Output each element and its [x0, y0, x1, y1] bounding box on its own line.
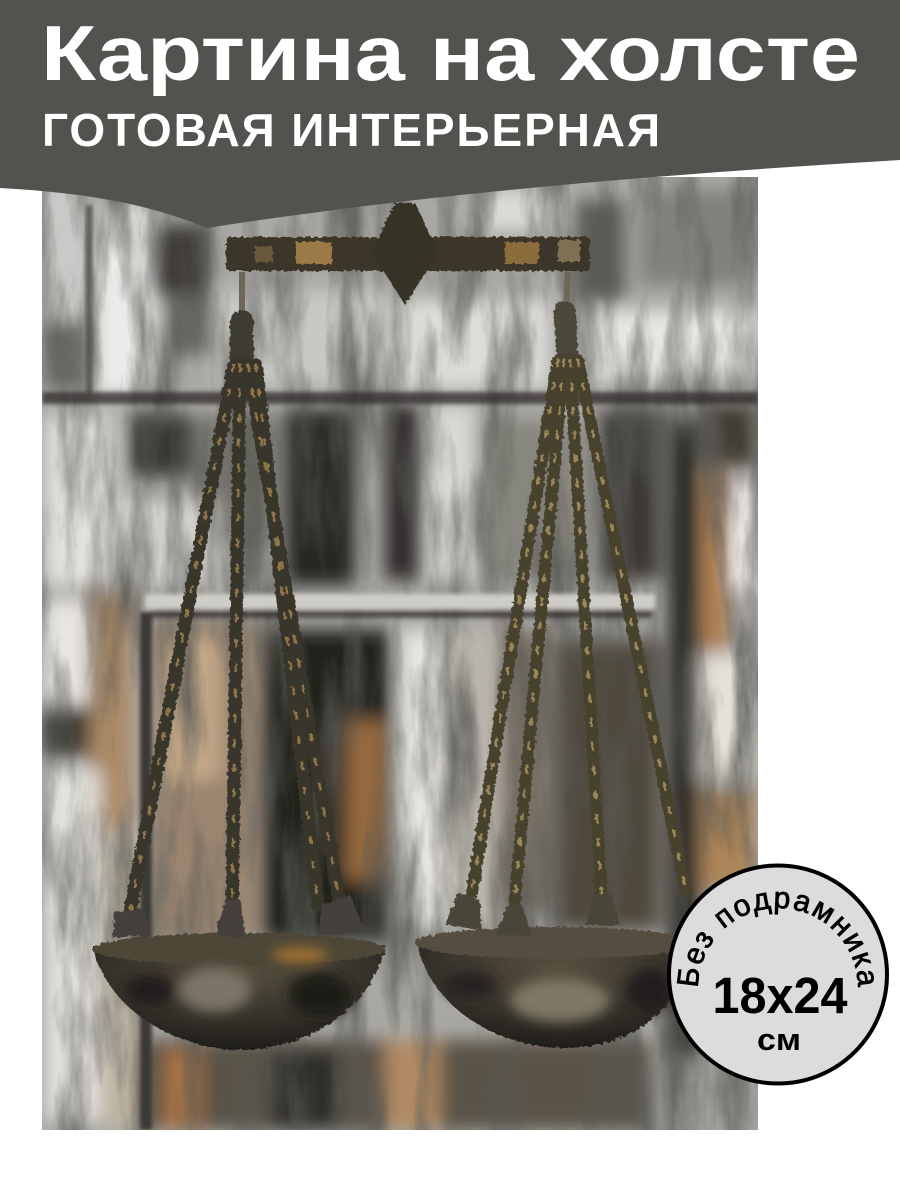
- badge size number: 18x24: [712, 967, 848, 1024]
- scale beam: [226, 203, 590, 305]
- vertical seams: [86, 205, 92, 395]
- left hanger: [239, 272, 245, 311]
- subtitle: ГОТОВАЯ ИНТЕРЬЕРНАЯ: [42, 104, 660, 156]
- horizontal beam of wall: [42, 392, 758, 404]
- light window frame: [140, 594, 655, 1130]
- left pan: [92, 895, 386, 1050]
- weathered wall background: [42, 177, 758, 1130]
- left chains: [130, 322, 340, 915]
- header banner: [0, 0, 900, 228]
- right hanger: [566, 272, 568, 312]
- painting: rusty scales on weathered wall: [42, 177, 758, 1130]
- size badge: [667, 864, 889, 1086]
- right chains: [472, 312, 686, 908]
- title: Картина на холсте: [41, 9, 860, 97]
- streaks texture: [42, 177, 758, 1130]
- right pan: [415, 892, 700, 1048]
- badge unit: см: [757, 1022, 801, 1057]
- curved badge caption: Без подрамника: [676, 892, 874, 988]
